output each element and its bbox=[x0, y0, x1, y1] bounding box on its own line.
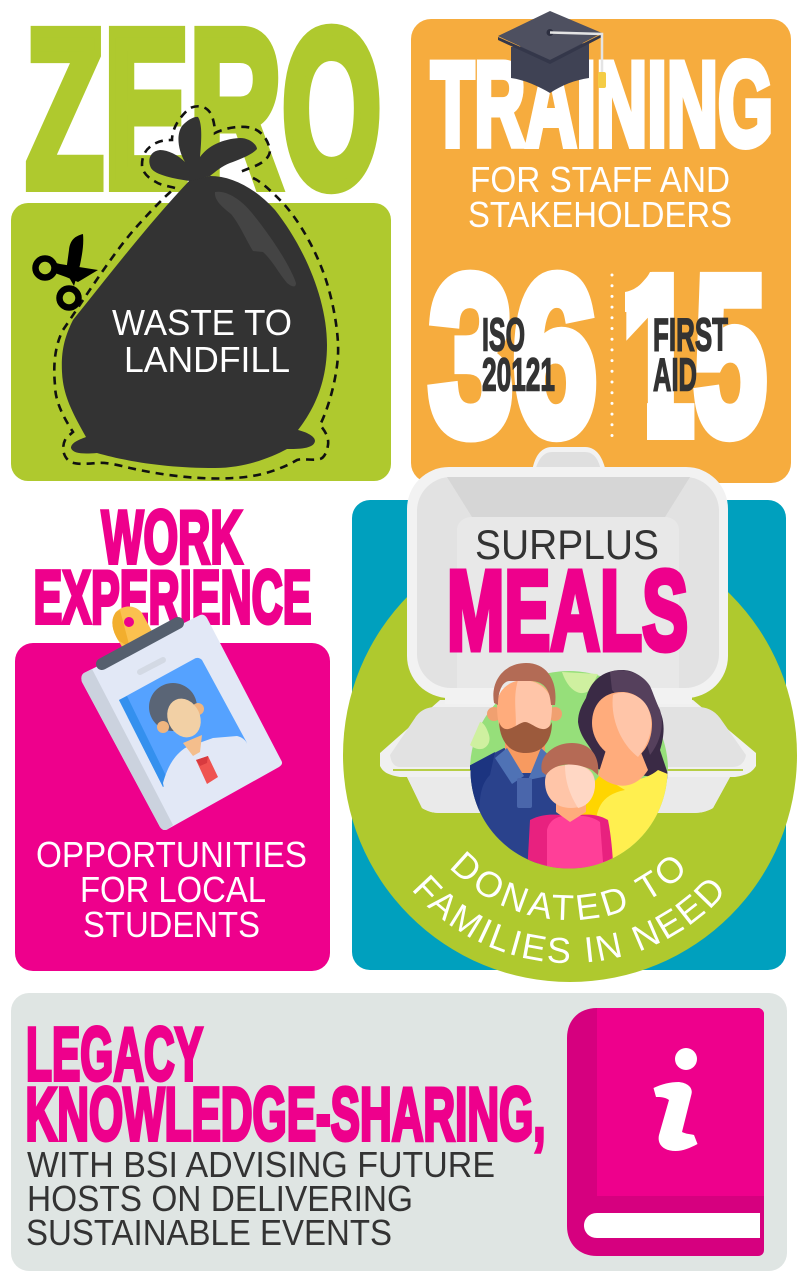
stat: 36 ISO 20121 bbox=[429, 231, 597, 481]
body text: HOSTS ON DELIVERING bbox=[27, 1178, 413, 1219]
panel: surplus meals bbox=[343, 447, 797, 982]
subheading: for staff and stakeholders bbox=[468, 159, 732, 235]
panel: zero waste bbox=[11, 0, 391, 481]
label: surplus: SURPLUS bbox=[475, 521, 659, 568]
caption: opportunities for local students: STUDENTS bbox=[83, 904, 260, 945]
heading: work experience: EXPERIENCE bbox=[34, 555, 312, 639]
icon: id badge bbox=[81, 606, 282, 830]
bag label: waste to landfill: LANDFILL bbox=[124, 339, 290, 380]
stat: 36 ISO 20121: ISO bbox=[482, 308, 525, 360]
icon: info book bbox=[567, 1008, 764, 1256]
woman bbox=[578, 670, 668, 865]
icon: scissors bbox=[36, 234, 98, 308]
subheading: for staff and stakeholders: FOR STAFF AND bbox=[470, 159, 730, 200]
bag label: waste to landfill bbox=[112, 302, 292, 380]
icon: open food box bbox=[380, 447, 756, 813]
child bbox=[527, 743, 614, 880]
curved text: donated to families in need: DONATED TO bbox=[450, 851, 683, 920]
stat: 15 first aid: AID bbox=[653, 348, 697, 400]
man bbox=[470, 663, 562, 864]
green panel background bbox=[11, 203, 391, 481]
body text bbox=[26, 1144, 495, 1253]
illustration: family bbox=[465, 663, 670, 880]
caption: opportunities for local students: FOR LOCAL bbox=[80, 869, 266, 910]
body text: WITH BSI ADVISING FUTURE bbox=[27, 1144, 495, 1185]
heading: legacy knowledge-sharing bbox=[26, 1012, 546, 1156]
stat: 36 ISO 20121: 36 bbox=[429, 231, 597, 481]
panel: training bbox=[411, 11, 791, 483]
icon: graduation cap bbox=[498, 11, 606, 93]
cut line around bag bbox=[54, 106, 338, 479]
icon: rubbish bag bbox=[62, 117, 327, 468]
panel: legacy bbox=[11, 993, 787, 1271]
grey panel background bbox=[11, 993, 787, 1271]
curved text: donated to families in need: FAMILIES IN NEED bbox=[412, 874, 722, 964]
dotted divider bbox=[610, 275, 614, 436]
stat: 15 first aid: FIRST bbox=[653, 308, 728, 360]
subheading: for staff and stakeholders: STAKEHOLDERS bbox=[468, 194, 732, 235]
bag label: waste to landfill: WASTE TO bbox=[112, 302, 292, 343]
orange panel background bbox=[411, 19, 791, 483]
caption: opportunities for local students: OPPORTUNITIES bbox=[36, 834, 307, 875]
body text: SUSTAINABLE EVENTS bbox=[26, 1212, 392, 1253]
green circle bbox=[343, 528, 797, 982]
caption: opportunities for local students bbox=[36, 834, 307, 945]
heading: work experience bbox=[34, 495, 312, 639]
heading: work experience: WORK bbox=[102, 495, 242, 579]
pink panel background bbox=[15, 643, 330, 971]
heading: legacy knowledge-sharing: LEGACY bbox=[26, 1012, 203, 1096]
panel: work experience bbox=[15, 495, 330, 971]
stat: 36 ISO 20121: 20121 bbox=[482, 348, 555, 400]
teal panel background bbox=[352, 500, 786, 970]
